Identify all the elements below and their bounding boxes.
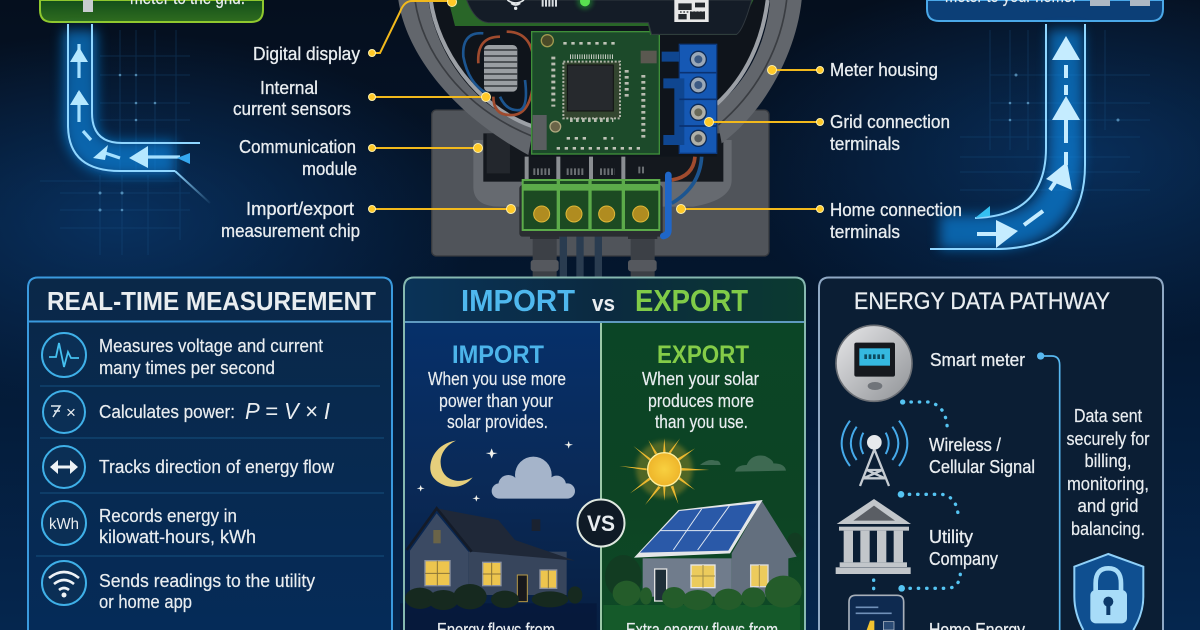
labels: meter parts right: terminals [830, 134, 900, 154]
arrow: left energy flow pipe [68, 24, 210, 203]
callout leader lines [368, 0, 824, 214]
internal wires and coil [463, 32, 534, 115]
item: direction [43, 446, 335, 488]
export column: than you use. [655, 412, 748, 432]
labels: meter parts right: Grid connection [830, 112, 950, 132]
labels: meter parts right: Home connection [830, 200, 962, 220]
labels: meter parts left: module [302, 159, 357, 179]
secure data note: balancing. [1071, 519, 1145, 539]
labels: meter parts left: measurement chip [221, 221, 360, 241]
icon: phone app [849, 595, 904, 630]
export column [601, 322, 805, 630]
arrow: right energy flow pipe [930, 24, 1085, 249]
heading: ENERGY DATA PATHWAY [854, 288, 1110, 315]
labels: meter parts left: Communication [239, 137, 356, 157]
icon: smart meter [836, 325, 912, 401]
item: power: P = V × I [245, 398, 331, 424]
pathway labels [929, 350, 1035, 630]
labels: meter parts left: Digital display [253, 44, 360, 64]
vs badge: VS [587, 511, 615, 536]
panel: real-time measurement [28, 278, 392, 630]
item: voltage and current: many times per second [99, 358, 275, 378]
dotted connectors [874, 402, 960, 590]
pathway labels: Smart meter [930, 350, 1025, 370]
export column: EXPORT [657, 341, 749, 369]
item: power [43, 391, 331, 433]
night house scene [400, 441, 597, 630]
item: kWh: Records energy in [99, 506, 237, 526]
secure data note: and grid [1078, 496, 1138, 516]
secure data note: monitoring, [1067, 474, 1149, 494]
pathway labels: Utility [929, 527, 973, 547]
item: voltage and current [42, 333, 323, 378]
export column: When your solar [642, 369, 759, 389]
panel: import vs export [400, 278, 805, 630]
icon: signal tower [842, 421, 907, 486]
labels: meter parts right: Meter housing [830, 60, 938, 80]
labels: meter parts left: Internal [260, 78, 318, 98]
labels: meter parts left: current sensors [233, 99, 351, 119]
import column: IMPORT [452, 341, 544, 369]
pathway labels: Wireless / [929, 435, 1001, 455]
flow panel: home supply label [927, 0, 1163, 21]
smart meter cutaway illustration [398, 0, 802, 278]
day solar house scene [603, 438, 803, 630]
item: send readings: or home app [99, 592, 192, 612]
cables [530, 236, 658, 276]
top display housing [448, 0, 753, 35]
pathway labels: Cellular Signal [929, 457, 1035, 477]
labels: meter parts right: terminals [830, 222, 900, 242]
heading: IMPORT [461, 283, 575, 318]
export column: produces more [648, 391, 754, 411]
heading: REAL-TIME MEASUREMENT [47, 286, 376, 316]
heading: EXPORT [635, 283, 748, 318]
heading [462, 290, 748, 312]
labels: meter parts left [221, 44, 360, 241]
secure data note: Data sent [1074, 406, 1142, 426]
icon: shield lock [1074, 554, 1143, 630]
item: send readings: Sends readings to the utility [99, 571, 315, 591]
panel: energy data pathway [819, 278, 1163, 630]
import column: When you use more [428, 369, 566, 389]
secure data note: securely for [1066, 429, 1150, 449]
import column: solar provides. [447, 412, 548, 432]
secure data note [1066, 406, 1150, 539]
circuit board [532, 32, 659, 154]
item: power: × [66, 403, 76, 422]
item: kWh [42, 501, 256, 547]
vs badge [578, 322, 624, 630]
heading: vs [592, 291, 615, 316]
import column: power than your [439, 391, 553, 411]
secure data note: billing, [1084, 451, 1132, 471]
grid connection terminals [662, 44, 717, 153]
import column [405, 322, 601, 630]
item: kWh: kWh [49, 516, 79, 533]
meter housing ring [398, 0, 802, 155]
item: voltage and current: Measures voltage and current [99, 336, 323, 356]
labels: meter parts right [830, 60, 962, 242]
item: kWh: kilowatt-hours, kWh [99, 527, 256, 547]
flow panel: grid import label [40, 0, 263, 22]
item: direction: Tracks direction of energy flow [99, 457, 335, 477]
home connection terminals [519, 175, 668, 237]
mounting plate [432, 110, 769, 256]
secure data line [1037, 352, 1060, 630]
icon: utility building [836, 499, 911, 574]
lower bracket [473, 140, 732, 207]
labels: meter parts left: Import/export [246, 199, 354, 219]
pathway labels: Company [929, 549, 998, 569]
icon: wifi [507, 0, 524, 5]
item: power: Calculates power: [99, 402, 235, 422]
item: send readings [42, 561, 315, 612]
